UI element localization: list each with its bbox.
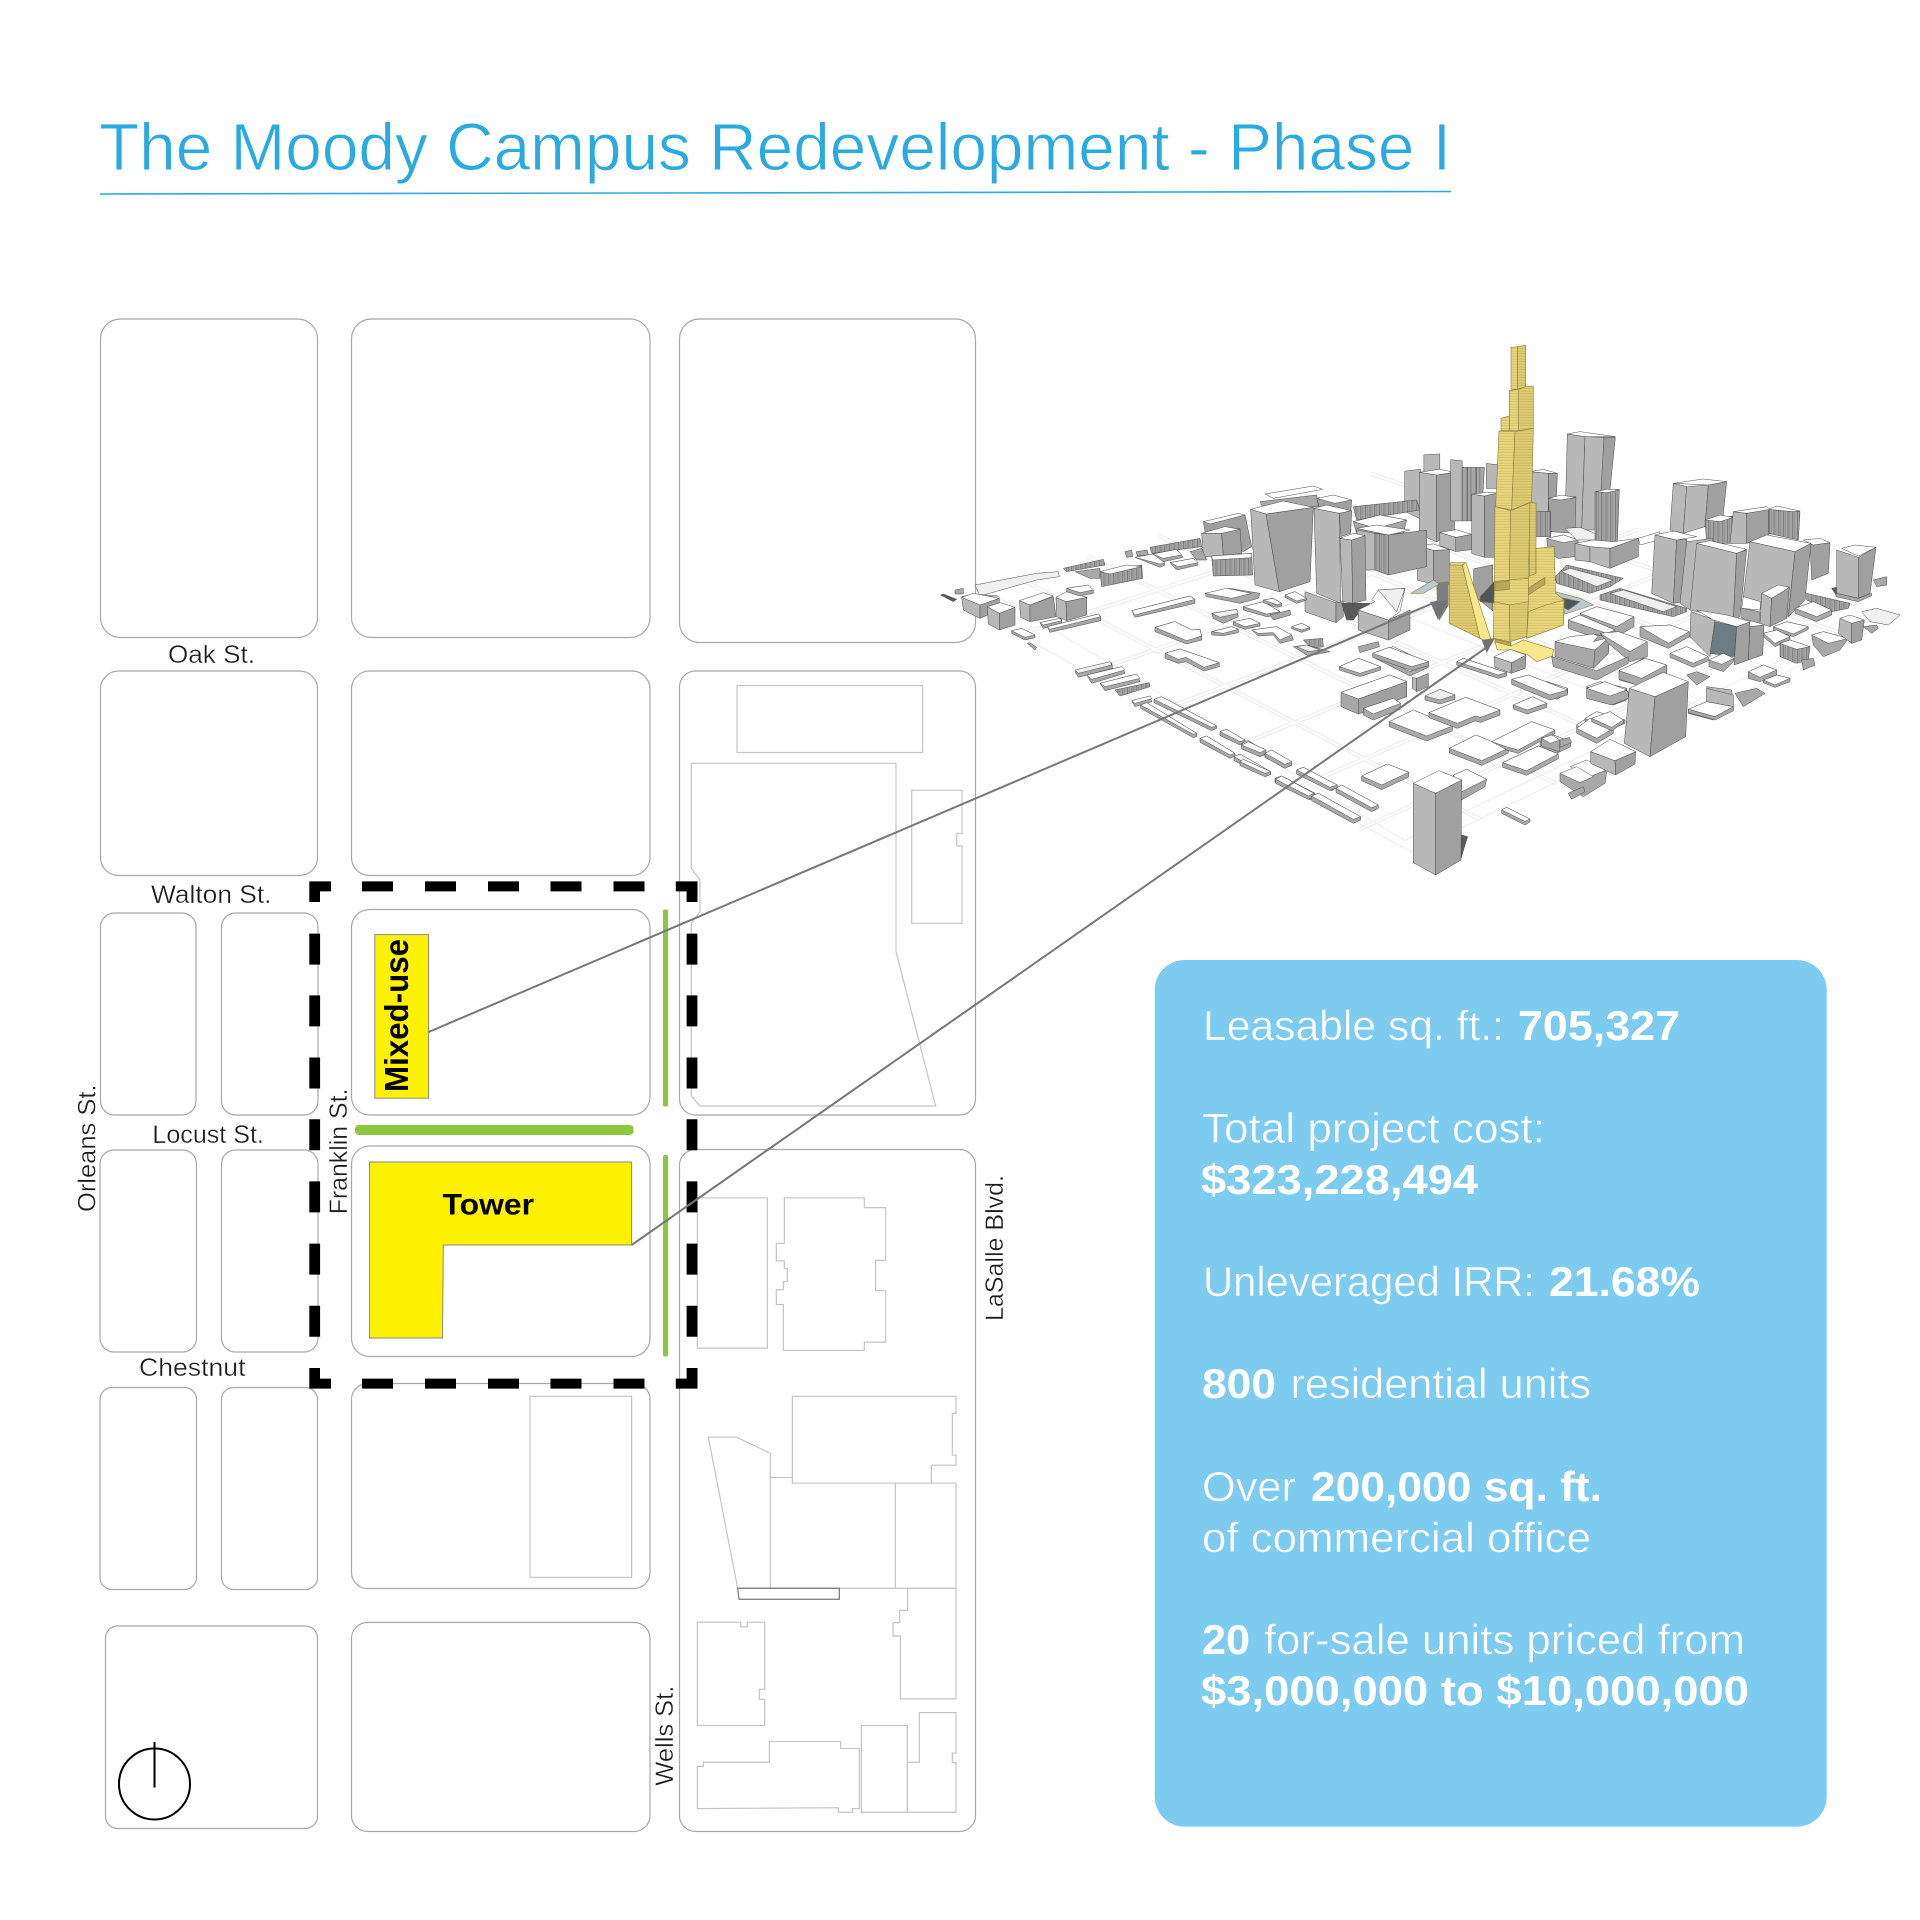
street labels: Orleans St. [74, 1084, 102, 1212]
for-sale units [1201, 1616, 1749, 1714]
street labels: Wells St. [651, 1686, 679, 1786]
site: mixed-use footprint: Mixed-use [378, 939, 415, 1092]
for-sale units: for-sale units priced from [1264, 1616, 1745, 1663]
commercial office: of commercial office [1202, 1514, 1591, 1561]
icon: north arrow [119, 1742, 190, 1820]
building footprints: upper LaSalle block [530, 686, 962, 1577]
leader line: mixed-use to model [429, 601, 1448, 1032]
street labels: Locust St. [152, 1121, 264, 1149]
street labels: LaSalle Blvd. [981, 1175, 1009, 1321]
3D city model: right rear buildings [1530, 432, 1887, 627]
commercial office [1202, 1463, 1602, 1561]
leasable square feet: 705,327 [1518, 1002, 1680, 1049]
street labels: Walton St. [151, 881, 272, 909]
street labels: Oak St. [168, 641, 255, 669]
street labels [74, 641, 1009, 1786]
panel: project stats [1155, 960, 1827, 1827]
site: mixed-use footprint [375, 935, 429, 1098]
street map blocks [100, 319, 976, 1832]
3D city model: left rear buildings [1202, 486, 1427, 640]
3D city model: ground street grid [958, 473, 1902, 852]
building footprints: lower LaSalle block [697, 1198, 956, 1812]
site: tower footprint: Tower [442, 1189, 534, 1222]
site boundary dashed outline [309, 881, 698, 1389]
leader line: tower to model [632, 638, 1495, 1245]
title: The Moody Campus Redevelopment - Phase I [99, 110, 1451, 185]
total project cost [1201, 1104, 1545, 1203]
site: tower footprint [370, 1162, 632, 1338]
3D city model: left foreground low buildings [941, 538, 1428, 800]
commercial office: 200,000 sq. ft. [1311, 1463, 1602, 1510]
unleveraged IRR: Unleveraged IRR: [1203, 1258, 1535, 1305]
total project cost: Total project cost: [1202, 1104, 1545, 1152]
3D city model: central rear towers [1405, 454, 1497, 611]
unleveraged IRR [1203, 1258, 1700, 1305]
3D city model: central foreground buildings [1240, 647, 1733, 875]
for-sale units: 20 [1202, 1616, 1250, 1663]
total project cost: $323,228,494 [1201, 1156, 1479, 1203]
residential units: 800 [1202, 1360, 1276, 1407]
leasable square feet [1203, 1002, 1680, 1049]
for-sale units: $3,000,000 to $10,000,000 [1201, 1667, 1749, 1714]
green streetscape strips [355, 910, 668, 1356]
unleveraged IRR: 21.68% [1549, 1258, 1700, 1305]
commercial office: Over [1202, 1463, 1296, 1510]
3D city model: proposed yellow tower and mixed-use building [1411, 345, 1593, 662]
residential units: residential units [1290, 1360, 1591, 1407]
street labels: Franklin St. [325, 1089, 353, 1214]
street labels: Chestnut [139, 1354, 246, 1382]
3D city model: right foreground low buildings [1535, 607, 1900, 753]
leasable square feet: Leasable sq. ft.: [1203, 1002, 1504, 1049]
